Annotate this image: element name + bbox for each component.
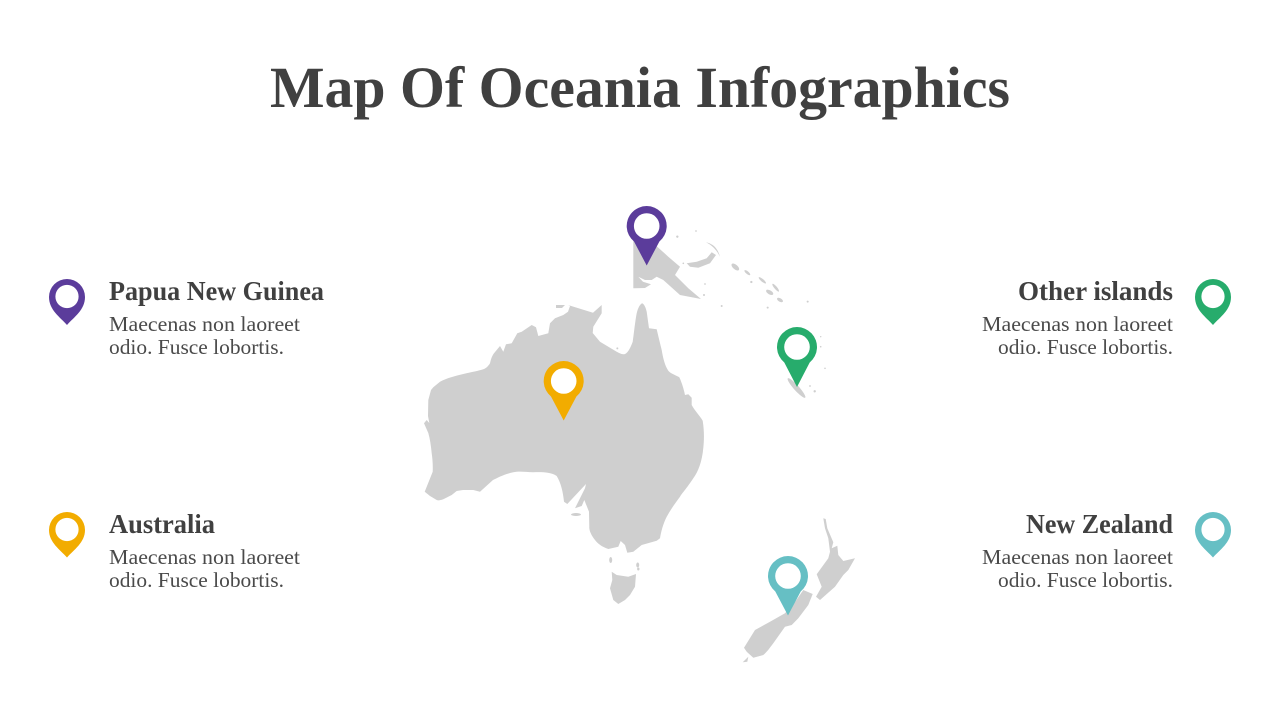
heading: New Zealand bbox=[1026, 509, 1173, 539]
title: Map Of Oceania Infographics bbox=[270, 55, 1010, 120]
map: New Zealand bbox=[743, 518, 855, 662]
map pin: New Zealand bbox=[768, 556, 808, 616]
text block bbox=[982, 545, 1173, 592]
text block bbox=[109, 545, 300, 592]
text block: odio. Fusce lobortis. bbox=[109, 568, 284, 592]
map: Australia and Tasmania bbox=[424, 303, 704, 604]
panel: Australia bbox=[49, 509, 300, 592]
map pin: Papua New Guinea bbox=[627, 206, 667, 266]
icon: teal location pin bbox=[1195, 512, 1231, 558]
text block bbox=[109, 312, 300, 359]
map: Papua New Guinea and Solomon Islands bbox=[616, 230, 809, 349]
panel: Other islands bbox=[982, 276, 1231, 359]
text block bbox=[982, 312, 1173, 359]
map of Oceania bbox=[424, 230, 855, 662]
text block: odio. Fusce lobortis. bbox=[109, 335, 284, 359]
text block: Maecenas non laoreet bbox=[109, 545, 300, 569]
text block: Maecenas non laoreet bbox=[982, 545, 1173, 569]
map pin: Australia bbox=[544, 361, 584, 420]
text block: odio. Fusce lobortis. bbox=[998, 568, 1173, 592]
text block: Maecenas non laoreet bbox=[982, 312, 1173, 336]
icon: gold location pin bbox=[49, 512, 85, 558]
map: New Caledonia and Vanuatu bbox=[786, 336, 826, 399]
text block: odio. Fusce lobortis. bbox=[998, 335, 1173, 359]
heading: Other islands bbox=[1018, 276, 1173, 306]
icon: purple location pin bbox=[49, 279, 85, 325]
panel: Papua New Guinea bbox=[49, 276, 324, 359]
map pin: Other islands bbox=[777, 327, 817, 387]
heading: Papua New Guinea bbox=[109, 276, 324, 306]
text block: Maecenas non laoreet bbox=[109, 312, 300, 336]
icon: green location pin bbox=[1195, 279, 1231, 325]
heading: Australia bbox=[109, 509, 215, 539]
panel: New Zealand bbox=[982, 509, 1231, 592]
